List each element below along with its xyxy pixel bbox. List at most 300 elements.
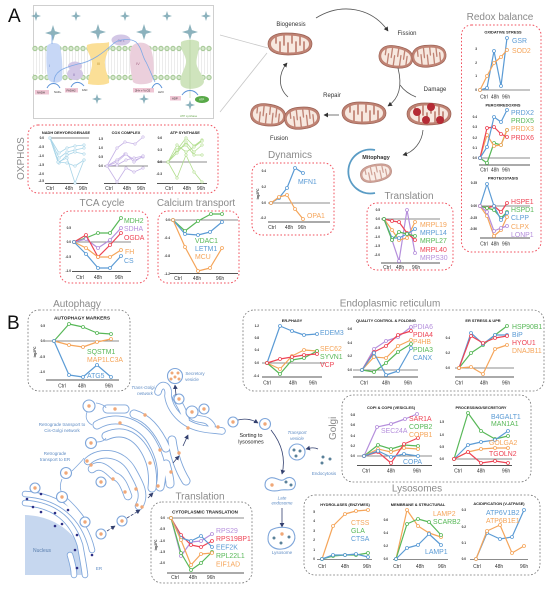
chart: proteostasis: 48h xyxy=(491,242,499,248)
complex III xyxy=(87,42,109,85)
chart: NADH dehydrogenase: -2.5 xyxy=(38,179,44,183)
chart: ER stress and UPR: Ctrl xyxy=(455,380,463,386)
chart: COPI and COPII vesicles: COPB1 xyxy=(409,432,433,439)
chart: proteostasis xyxy=(470,176,534,248)
chart: membrane and structural: MEMBRANE & STRUCTURAL xyxy=(391,502,446,507)
panel: mitochondrial translation chart: 96h xyxy=(412,265,420,271)
chart: processing and secretory: 0.5 xyxy=(440,445,444,449)
panel: cytoplasmic translation chart: 96h xyxy=(207,575,215,581)
chart: peroxiredoxins xyxy=(473,102,534,174)
pathway labels: transport to ER xyxy=(40,457,71,462)
pathway labels: network xyxy=(137,391,154,396)
panel: cytoplasmic translation chart xyxy=(151,502,252,583)
chart: NADH dehydrogenase: -2.0 xyxy=(38,172,44,176)
panel: TCA cycle chart: 96h xyxy=(115,275,123,281)
chart: quality control and folding: 0.4 xyxy=(348,341,352,345)
panel label B: B xyxy=(7,313,20,334)
chart: peroxiredoxins: PRDX3 xyxy=(511,126,534,133)
chart: ER-phagy: -0.4 xyxy=(254,374,259,378)
chart: quality control and folding: 0.6 xyxy=(348,327,352,331)
secretory vesicle: Secretory xyxy=(185,371,205,376)
late endosome: Late xyxy=(278,496,287,500)
complex II: II xyxy=(73,72,75,77)
chart: quality control and folding: 0.0 xyxy=(348,368,352,372)
panel: cytoplasmic translation chart: -0.5 xyxy=(160,527,165,531)
chart: oxidative stress: 48h xyxy=(491,94,499,100)
panel: Calcium transport chart: Ctrl xyxy=(174,276,182,282)
nucleus xyxy=(25,515,88,575)
chart: acidification: 0.2 xyxy=(462,525,466,529)
panel: mitochondrial translation chart: 0.5 xyxy=(376,208,380,212)
panel: cytoplasmic translation chart: EIF1AD xyxy=(216,562,240,568)
chart: membrane and structural: LAMP2 xyxy=(433,511,456,518)
chart: ER stress and UPR: 48h xyxy=(480,380,488,386)
Golgi label: Golgi xyxy=(328,417,339,440)
Sorting to lysosomes label xyxy=(238,433,264,446)
panel: cytoplasmic translation chart: RPL22L1 xyxy=(216,553,245,560)
panel: Dynamics chart: 96h xyxy=(298,225,306,231)
chart: proteostasis: CLPP xyxy=(511,215,529,222)
chart: peroxiredoxins: PRDX6 xyxy=(511,135,534,142)
chart: hydrolases: 5 xyxy=(313,510,315,514)
chart: peroxiredoxins: Ctrl xyxy=(480,168,488,174)
chart: proteostasis: 0.25 xyxy=(471,181,477,185)
panel: TCA cycle chart: MDH2 xyxy=(124,218,144,225)
substrate labels: ATP synthase xyxy=(180,114,198,118)
chart: COPI and COPII vesicles: 0.6 xyxy=(351,423,355,427)
pathway labels: Retrograde xyxy=(44,451,67,456)
Golgi cisternae xyxy=(88,386,222,506)
chart: oxidative stress: SOD2 xyxy=(512,48,531,55)
panel: cytoplasmic translation chart: 48h xyxy=(189,575,197,581)
heading: Endoplasmic reticulum: Endoplasmic reticulum xyxy=(340,298,440,310)
stage: mitophagy xyxy=(348,150,393,193)
Sorting to lysosomes label: lysosomes xyxy=(238,440,264,446)
panel: Calcium transport chart xyxy=(158,211,239,283)
panel: TCA cycle chart: -1.0 xyxy=(66,269,71,273)
chart: oxidative stress: 3 xyxy=(475,47,477,51)
panel: TCA cycle chart: SDHA xyxy=(124,226,144,233)
chart: quality control and folding: PDIA4 xyxy=(413,332,433,339)
chart: COPI and COPII vesicles: COPB2 xyxy=(409,424,433,431)
panel: Autophagy markers: -0.5 xyxy=(40,355,45,359)
chart: peroxiredoxins: 0.0 xyxy=(473,156,477,160)
chart: ATP synthase xyxy=(156,130,207,192)
chart: membrane and structural: 0.2 xyxy=(384,544,388,548)
transport vesicles xyxy=(30,394,270,539)
cytochrome c xyxy=(112,34,130,46)
electron transfer path xyxy=(52,35,155,82)
chart: hydrolases: 1 xyxy=(313,548,315,552)
chart: oxidative stress: Ctrl xyxy=(480,94,488,100)
stage: damage xyxy=(407,87,451,125)
chart: ATP synthase: 0.3 xyxy=(158,148,162,152)
panel: mitochondrial translation chart xyxy=(367,203,453,271)
pathway labels: Cis-Golgi network xyxy=(44,428,81,433)
chart: NADH dehydrogenase: NADH DEHYDROGENASE xyxy=(42,130,91,135)
chart: peroxiredoxins: 0.2 xyxy=(473,136,477,140)
chart: ER-phagy: Ctrl xyxy=(263,380,271,386)
chart: COPI and COPII vesicles: SAR1A xyxy=(409,416,432,423)
chart: proteostasis: -0.25 xyxy=(470,216,477,220)
chart: oxidative stress: 0 xyxy=(475,88,477,92)
chart: ER-phagy: EDEM3 xyxy=(320,330,344,337)
substrate labels: FAD xyxy=(82,88,87,92)
chart: proteostasis: HSPD1 xyxy=(511,207,534,214)
complex IV: IV xyxy=(136,61,140,66)
substrate labels: H2O xyxy=(158,90,165,94)
panel: Dynamics chart: 0.0 xyxy=(262,201,266,205)
chart: COX complex: COX COMPLEX xyxy=(112,130,141,135)
chart: proteostasis: 0.00 xyxy=(471,204,477,208)
chart: ER stress and UPR: HSP90B1 xyxy=(512,324,542,331)
chart: NADH dehydrogenase: 0.0 xyxy=(40,136,44,140)
chart: quality control and folding: 48h xyxy=(382,380,390,386)
chart: COX complex: 1.0 xyxy=(99,146,103,150)
chart: peroxiredoxins: 96h xyxy=(502,168,510,174)
chart: COX complex: 1.5 xyxy=(99,137,103,141)
panel: Calcium transport chart: 96h xyxy=(216,276,224,282)
panel: Calcium transport chart: 48h xyxy=(193,276,201,282)
panel: mitochondrial translation chart: MRPL27 xyxy=(420,238,447,245)
heading: Redox balance: Redox balance xyxy=(467,12,534,23)
chart: processing and secretory: 0.0 xyxy=(440,457,444,461)
panel: Autophagy markers: Ctrl xyxy=(58,384,66,390)
panel: Golgi xyxy=(342,395,531,482)
panel: Calcium transport chart: LETM1 xyxy=(195,246,217,253)
panel: Redox balance xyxy=(462,25,541,252)
panel: Autophagy markers: 96h xyxy=(105,384,113,390)
chart: peroxiredoxins: 0.1 xyxy=(473,146,477,150)
complex II xyxy=(67,62,83,80)
icon: intermembrane stars xyxy=(31,11,211,110)
chart: acidification xyxy=(462,501,528,570)
chart: peroxiredoxins: 0.3 xyxy=(473,125,477,129)
chart: membrane and structural: 96h xyxy=(438,564,446,570)
nucleus: Nucleus xyxy=(33,548,52,554)
pathway labels: ER xyxy=(96,566,103,571)
chart: oxidative stress: GSR xyxy=(512,38,527,45)
chart: COX complex: 96h xyxy=(137,186,145,192)
panel: TCA cycle chart: Ctrl xyxy=(76,275,84,281)
cytochrome c: Cyt c xyxy=(118,38,125,42)
chart: peroxiredoxins: 48h xyxy=(491,168,499,174)
chart: peroxiredoxins: PRDX2 xyxy=(511,110,534,117)
heading: Translation (cytoplasmic): Translation xyxy=(175,492,225,502)
pathway labels: Trans-Golgi xyxy=(131,385,156,390)
chart: proteostasis: Ctrl xyxy=(480,242,488,248)
panel: Autophagy markers: ATG5 xyxy=(87,373,105,380)
panel: Autophagy markers: -1.0 xyxy=(40,370,45,374)
substrate labels: 2H+ + ½ O2 xyxy=(135,88,151,92)
substrate labels xyxy=(35,88,209,118)
chart: ER-phagy: ER-PHAGY xyxy=(282,318,303,323)
chart: NADH dehydrogenase: 96h xyxy=(79,186,87,192)
chart: acidification: ACIDIFICATION (V-ATPASE) xyxy=(473,501,525,506)
mitochondrial life cycle xyxy=(249,9,451,193)
chart: ER-phagy: 0.8 xyxy=(255,336,259,340)
illustration: secretory pathway xyxy=(25,368,337,575)
chart: ATP synthase: 0.0 xyxy=(158,160,162,164)
chart: quality control and folding: P4HB xyxy=(413,339,431,346)
panel: TCA cycle chart: FH xyxy=(125,249,134,256)
chart: ATP synthase: -0.3 xyxy=(156,172,162,176)
panel: electron transport chain diagram xyxy=(31,6,214,118)
chart: quality control and folding: Ctrl xyxy=(360,380,368,386)
chart: hydrolases: 96h xyxy=(363,564,371,570)
panel: Autophagy markers: 48h xyxy=(78,384,86,390)
chart: ER stress and UPR: ER STRESS & UPR xyxy=(465,318,501,323)
chart: membrane and structural: 0.6 xyxy=(384,518,388,522)
chart: COPI and COPII vesicles: 0.8 xyxy=(351,413,355,417)
chart: COX complex xyxy=(99,130,148,192)
chart: membrane and structural: Ctrl xyxy=(393,564,401,570)
panel: Dynamics chart: Ctrl xyxy=(268,225,276,231)
chart: proteostasis: PROTEOSTASIS xyxy=(488,176,518,180)
heading: Calcium transport: Calcium transport xyxy=(157,198,235,209)
heading: TCA cycle: TCA cycle xyxy=(79,198,125,209)
chart: COPI and COPII vesicles: SEC24A xyxy=(381,428,408,435)
chart: acidification: 48h xyxy=(495,564,503,570)
chart: ER stress and UPR: 0.2 xyxy=(446,351,450,355)
panel: Lysosomes xyxy=(304,495,540,575)
lysosome xyxy=(268,527,295,555)
secretory vesicle: vesicle xyxy=(185,377,199,382)
Sorting to lysosomes label: Sorting to xyxy=(239,433,263,439)
chart: COX complex: 0.0 xyxy=(99,164,103,168)
chart: ER-phagy: 1.2 xyxy=(255,324,259,328)
panel: TCA cycle chart: 0.0 xyxy=(67,240,71,244)
panel: mitochondrial translation chart: 0.0 xyxy=(376,217,380,221)
panel: cytoplasmic translation chart: -2.0 xyxy=(160,561,165,565)
chart: peroxiredoxins: 0.4 xyxy=(473,115,477,119)
secretory vesicle xyxy=(168,368,205,384)
chart: acidification: ATP6B1E1 xyxy=(486,518,520,525)
chart: proteostasis: -0.50 xyxy=(470,227,477,231)
panel: Dynamics chart: log2FC xyxy=(256,188,260,199)
chart: hydrolases: HYDROLASES (ENZYMES) xyxy=(320,502,370,507)
panel: Calcium transport chart: -1.2 xyxy=(164,272,170,276)
stage: fusion xyxy=(249,102,321,142)
panel label A: A xyxy=(8,6,21,27)
chart: COPI and COPII vesicles xyxy=(351,405,433,474)
chart: COPI and COPII vesicles: COPI & COPII (VESICLES) xyxy=(367,405,416,410)
chart: oxidative stress: 1 xyxy=(475,74,477,78)
substrate labels: NADH xyxy=(37,90,45,94)
complex IV xyxy=(130,43,154,84)
chart: hydrolases xyxy=(313,502,372,570)
chart: COX complex: Ctrl xyxy=(105,186,113,192)
panel: cytoplasmic translation chart: Ctrl xyxy=(171,575,179,581)
panel: TCA cycle chart: CS xyxy=(124,258,134,265)
panel: mitochondrial translation chart: 48h xyxy=(396,265,404,271)
heading: Dynamics: Dynamics xyxy=(268,150,312,161)
panel: Autophagy markers: 0.0 xyxy=(41,339,45,343)
panel: mitochondrial translation chart: MRPS30 xyxy=(420,255,448,262)
chart: ER-phagy xyxy=(254,318,344,386)
chart: ER stress and UPR: BiP xyxy=(512,332,523,339)
heading: Translation (mitochondrial): Translation xyxy=(384,191,434,202)
chart: COPI and COPII vesicles: COPA xyxy=(403,459,422,466)
chart: peroxiredoxins: PRDX5 xyxy=(511,118,534,125)
chart: acidification: ATP6V1B2 xyxy=(486,510,520,517)
chart: hydrolases: 2 xyxy=(313,538,315,542)
chart: COPI and COPII vesicles: 96h xyxy=(413,468,421,474)
icon: membrane bilayer xyxy=(33,48,213,78)
chart: COPI and COPII vesicles: 48h xyxy=(387,468,395,474)
chart: quality control and folding: PDIA3 xyxy=(413,347,433,354)
chart: hydrolases: Ctrl xyxy=(318,564,326,570)
chart: ER-phagy: 48h xyxy=(289,380,297,386)
chart: ER stress and UPR: 0.4 xyxy=(446,336,450,340)
chart: hydrolases: CTSA xyxy=(351,536,370,543)
complex I xyxy=(46,43,62,83)
chart: processing and secretory: 48h xyxy=(477,468,485,474)
chart: ER-phagy: SYVN1 xyxy=(320,354,343,361)
substrate labels: ATP xyxy=(199,98,204,102)
chart: processing and secretory: B4GALT1 xyxy=(491,414,521,421)
complex I: I xyxy=(49,63,50,68)
chart: hydrolases: 48h xyxy=(341,564,349,570)
panel: mitochondrial translation chart: Ctrl xyxy=(383,265,391,271)
panel: Dynamics chart xyxy=(252,163,334,235)
panel: Calcium transport chart: -0.4 xyxy=(164,236,170,240)
substrate labels: NAD+ xyxy=(54,90,62,94)
panel: cytoplasmic translation chart: 0.0 xyxy=(161,516,165,520)
chart: COPI and COPII vesicles: 0.4 xyxy=(351,434,355,438)
ATP synthase xyxy=(180,40,204,98)
chart: processing and secretory: GOLGA2 xyxy=(489,440,518,447)
connector lines to biogenesis xyxy=(220,35,268,112)
cycle arrows xyxy=(280,9,423,155)
heading: Lysosomes: Lysosomes xyxy=(392,484,442,494)
chart: ATP synthase: ATP SYNTHASE xyxy=(170,130,200,135)
chart: membrane and structural xyxy=(384,502,461,570)
panel: Autophagy markers: SQSTM1 xyxy=(87,349,116,356)
chart: processing and secretory: PROCESSING/SECRETORY xyxy=(455,405,507,410)
pathway labels: Retrograde transport to xyxy=(39,422,86,427)
chart: quality control and folding xyxy=(348,318,433,386)
chart: ER-phagy: VCP xyxy=(320,362,335,369)
chart: ATP synthase: 0.6 xyxy=(158,136,162,140)
stage: repair xyxy=(323,93,386,124)
panel: TCA cycle chart xyxy=(60,211,148,283)
chart: ATP synthase: 48h xyxy=(183,186,191,192)
stage: biogenesis: Biogenesis xyxy=(276,22,306,28)
heading: Autophagy: Autophagy xyxy=(53,299,101,310)
chart: proteostasis: LONP1 xyxy=(511,232,534,239)
late endosome xyxy=(265,478,295,506)
panel: Dynamics chart: -0.2 xyxy=(260,216,266,220)
chart: quality control and folding: PDIA6 xyxy=(413,324,433,331)
panel: TCA cycle chart: 0.5 xyxy=(67,226,71,230)
chart: oxidative stress: 2 xyxy=(475,61,477,65)
chart: ER stress and UPR xyxy=(446,318,542,386)
endoplasmic reticulum xyxy=(25,493,93,575)
chart: membrane and structural: 0.0 xyxy=(384,557,388,561)
complex III: III xyxy=(97,61,100,66)
chart: hydrolases: 3 xyxy=(313,529,315,533)
panel: TCA cycle chart: -0.5 xyxy=(66,255,71,259)
lysosome: Lysosome xyxy=(272,550,293,555)
late endosome: endosome xyxy=(271,500,293,506)
chart: membrane and structural: 48h xyxy=(416,564,424,570)
chart: acidification: 0.0 xyxy=(462,557,466,561)
chart: quality control and folding: CANX xyxy=(413,355,433,362)
chart: COPI and COPII vesicles: Ctrl xyxy=(362,468,370,474)
stage: damage: Damage xyxy=(424,87,447,93)
cargo dots xyxy=(85,407,220,509)
chart: membrane and structural: SCARB2 xyxy=(433,519,461,526)
panel: cytoplasmic translation chart: CYTOPLASMIC TRANSLATION xyxy=(172,510,238,514)
panel: mitochondrial translation chart: -0.5 xyxy=(374,226,380,230)
panel: cytoplasmic translation chart: -1.0 xyxy=(160,539,165,543)
panel: Dynamics chart: MFN1 xyxy=(298,179,317,186)
chart: oxidative stress: 96h xyxy=(502,94,510,100)
panel: mitochondrial translation chart: MRPL14 xyxy=(420,230,447,237)
chart: hydrolases: 0 xyxy=(313,557,315,561)
endocytosis: Endocytosis xyxy=(312,471,337,476)
chart: membrane and structural: 0.4 xyxy=(384,531,388,535)
chart: NADH dehydrogenase: 48h xyxy=(65,186,73,192)
chart: membrane and structural: LAMP1 xyxy=(425,549,448,556)
panel: mitochondrial translation chart: -1.5 xyxy=(374,244,380,248)
panel: cytoplasmic translation chart: log2FC xyxy=(154,539,158,550)
panel: Autophagy markers: 0.5 xyxy=(41,324,45,328)
panel: TCA cycle chart: 48h xyxy=(94,275,102,281)
panel: OXPHOS xyxy=(28,125,218,193)
chart: ER-phagy: 0.4 xyxy=(255,348,259,352)
chart: NADH dehydrogenase: -1.5 xyxy=(38,163,44,167)
chart: proteostasis: HSPE1 xyxy=(511,199,534,206)
chart: acidification: 96h xyxy=(520,564,528,570)
panel: cytoplasmic translation chart: RPS19BP1 xyxy=(216,536,251,543)
chart: processing and secretory: 96h xyxy=(502,468,510,474)
chart: peroxiredoxins: PEROXIREDOXINS xyxy=(485,102,521,108)
panel: TCA cycle chart: OGDA xyxy=(124,235,145,242)
panel: cytoplasmic translation chart: RPS29 xyxy=(216,528,238,535)
transport vesicle with label xyxy=(288,430,307,460)
stage: repair: Repair xyxy=(323,93,341,99)
transport vesicle with label: vesicle xyxy=(290,436,304,441)
chart: hydrolases: 4 xyxy=(313,519,315,523)
panel: Dynamics chart: 0.4 xyxy=(262,169,266,173)
forward transport arrows xyxy=(107,385,318,531)
retrograde arrows xyxy=(60,403,106,491)
chart: acidification: Ctrl xyxy=(473,564,481,570)
panel: Calcium transport chart: -0.8 xyxy=(164,254,170,258)
chart: COX complex: 0.5 xyxy=(99,155,103,159)
endocytosis xyxy=(312,456,337,476)
chart: processing and secretory: Ctrl xyxy=(454,468,462,474)
chart: processing and secretory: TGOLN2 xyxy=(489,451,517,458)
panel: mitochondrial translation chart: -1.0 xyxy=(374,235,380,239)
stage: biogenesis xyxy=(268,22,312,55)
chart: acidification: 0.1 xyxy=(462,541,466,545)
chart: NADH dehydrogenase: -0.5 xyxy=(38,145,44,149)
chart: NADH dehydrogenase: -1.0 xyxy=(38,154,44,158)
stage: fission: Fission xyxy=(397,31,417,37)
panel: Dynamics chart: 48h xyxy=(285,225,293,231)
chart: proteostasis: 96h xyxy=(502,242,510,248)
transport vesicle with label: Transport xyxy=(288,430,307,435)
chart: NADH dehydrogenase xyxy=(38,130,91,192)
chart: ER-phagy: 96h xyxy=(309,380,317,386)
chart: processing and secretory: 1.0 xyxy=(440,433,444,437)
NADH arcs xyxy=(47,82,198,95)
panel: Autophagy markers: AUTOPHAGY MARKERS xyxy=(54,316,111,322)
panel: Endoplasmic reticulum xyxy=(243,310,544,391)
